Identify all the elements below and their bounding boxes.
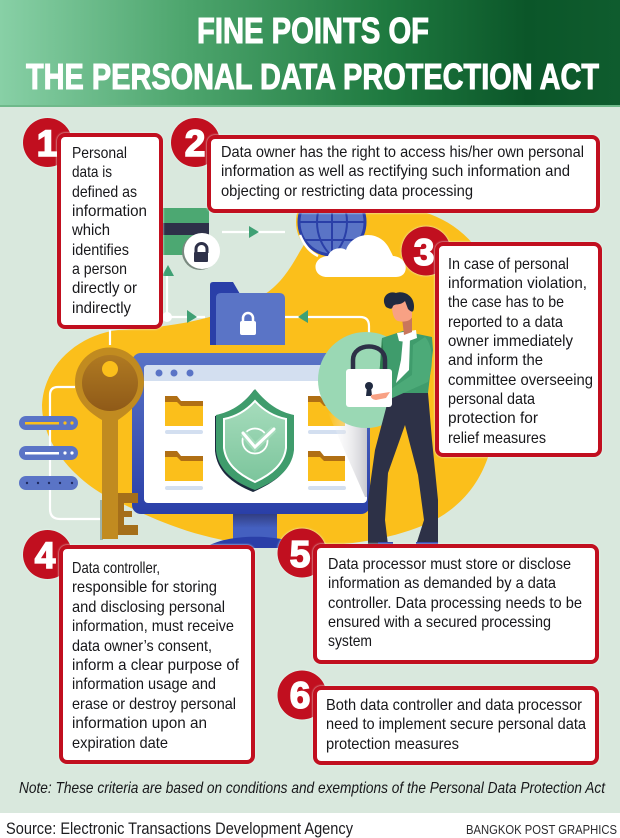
yellow blob background — [42, 206, 501, 546]
number badge 3: 3 — [414, 232, 434, 273]
text 6: Both data controller and data processor — [326, 697, 583, 714]
text 3 — [448, 256, 593, 447]
icon: shield with check — [215, 389, 294, 492]
panel 4 — [23, 530, 253, 762]
text 2 — [221, 144, 584, 200]
icon: server stack — [19, 416, 78, 490]
text 1 — [71, 145, 147, 317]
number badge 4: 4 — [35, 535, 56, 576]
text 4: and disclosing personal — [72, 599, 225, 616]
number badge 2: 2 — [185, 123, 205, 164]
icon: yellow folders — [165, 396, 346, 490]
number badge 5 — [278, 528, 326, 578]
text 5: ensured with a secured processing — [328, 614, 551, 631]
panel 6 — [278, 670, 597, 763]
source line: Source: Electronic Transactions Development Agency — [6, 819, 353, 838]
text 4: Data controller, — [72, 560, 160, 577]
title — [26, 10, 599, 97]
text 1: which — [71, 222, 110, 239]
text 5 — [328, 556, 582, 650]
title: FINE POINTS OF — [197, 10, 429, 51]
text 1: defined as — [72, 184, 137, 201]
number badge 1: 1 — [37, 123, 57, 164]
text 6 — [326, 697, 586, 753]
icon: blue folder with lock — [210, 282, 285, 345]
number badge 3 — [402, 226, 450, 276]
text 5: system — [328, 633, 372, 650]
number badge 6: 6 — [290, 675, 310, 716]
text 5: information as demanded by a data — [328, 575, 556, 592]
icon: key — [75, 348, 144, 540]
icon: credit card with lock — [140, 208, 220, 270]
text 4: information upon an — [72, 715, 207, 732]
text 5: Data processor must store or disclose — [328, 556, 571, 573]
text 4: responsible for storing — [72, 579, 217, 596]
text 3: and inform the — [448, 352, 543, 369]
text 6: need to implement secure personal data — [326, 716, 586, 733]
text 1: information — [72, 203, 147, 220]
text 1: Personal — [72, 145, 127, 162]
text 2: information as well as rectifying such information and — [221, 163, 570, 180]
text 4: information, must receive — [72, 618, 234, 635]
text 3: reported to a data — [448, 314, 563, 331]
panel 5 — [278, 528, 597, 662]
number badge 2 — [171, 118, 220, 167]
icon: monitor — [132, 353, 370, 548]
text 6: protection measures — [326, 736, 459, 753]
text 4: information usage and — [72, 676, 216, 693]
panel 3 — [402, 226, 600, 455]
header banner — [0, 0, 620, 107]
icon: padlock — [346, 346, 392, 407]
number badge 4 — [23, 530, 72, 579]
text 1: a person — [72, 261, 127, 278]
text 1: data is — [72, 164, 112, 181]
text 1: indirectly — [72, 300, 131, 317]
text 1: identifies — [72, 242, 129, 259]
text 3: personal data — [448, 391, 535, 408]
text 3: relief measures — [448, 430, 546, 447]
text 3: In case of personal — [448, 256, 569, 273]
text 4: expiration date — [72, 735, 168, 752]
illustration: data security scene — [19, 187, 501, 548]
figure: person holding padlock — [318, 292, 438, 548]
text 4: erase or destroy personal — [72, 696, 236, 713]
connector wires — [50, 232, 369, 519]
text 3: protection for — [448, 410, 539, 427]
text 3: information violation, — [448, 275, 587, 292]
text 3: committee overseeing — [448, 372, 593, 389]
text 1: directly or — [72, 280, 138, 297]
panel 2 — [171, 118, 598, 211]
panel 1 — [23, 118, 161, 327]
text 2: objecting or restricting data processing — [221, 183, 473, 200]
text 3: owner immediately — [448, 333, 573, 350]
icon: globe — [297, 187, 367, 257]
text 4: inform a clear purpose of — [72, 657, 240, 674]
number badge 1 — [23, 118, 72, 167]
text 4: data owner’s consent, — [72, 638, 212, 655]
number badge 5: 5 — [290, 534, 310, 575]
text 4 — [72, 560, 240, 752]
text 3: the case has to be — [448, 294, 564, 311]
text 5: controller. Data processing needs to be — [328, 595, 582, 612]
icon: cloud — [316, 235, 406, 277]
text 2: Data owner has the right to access his/her own personal — [221, 144, 584, 161]
number badge 6 — [278, 670, 326, 720]
icon: green arrows — [162, 226, 308, 323]
